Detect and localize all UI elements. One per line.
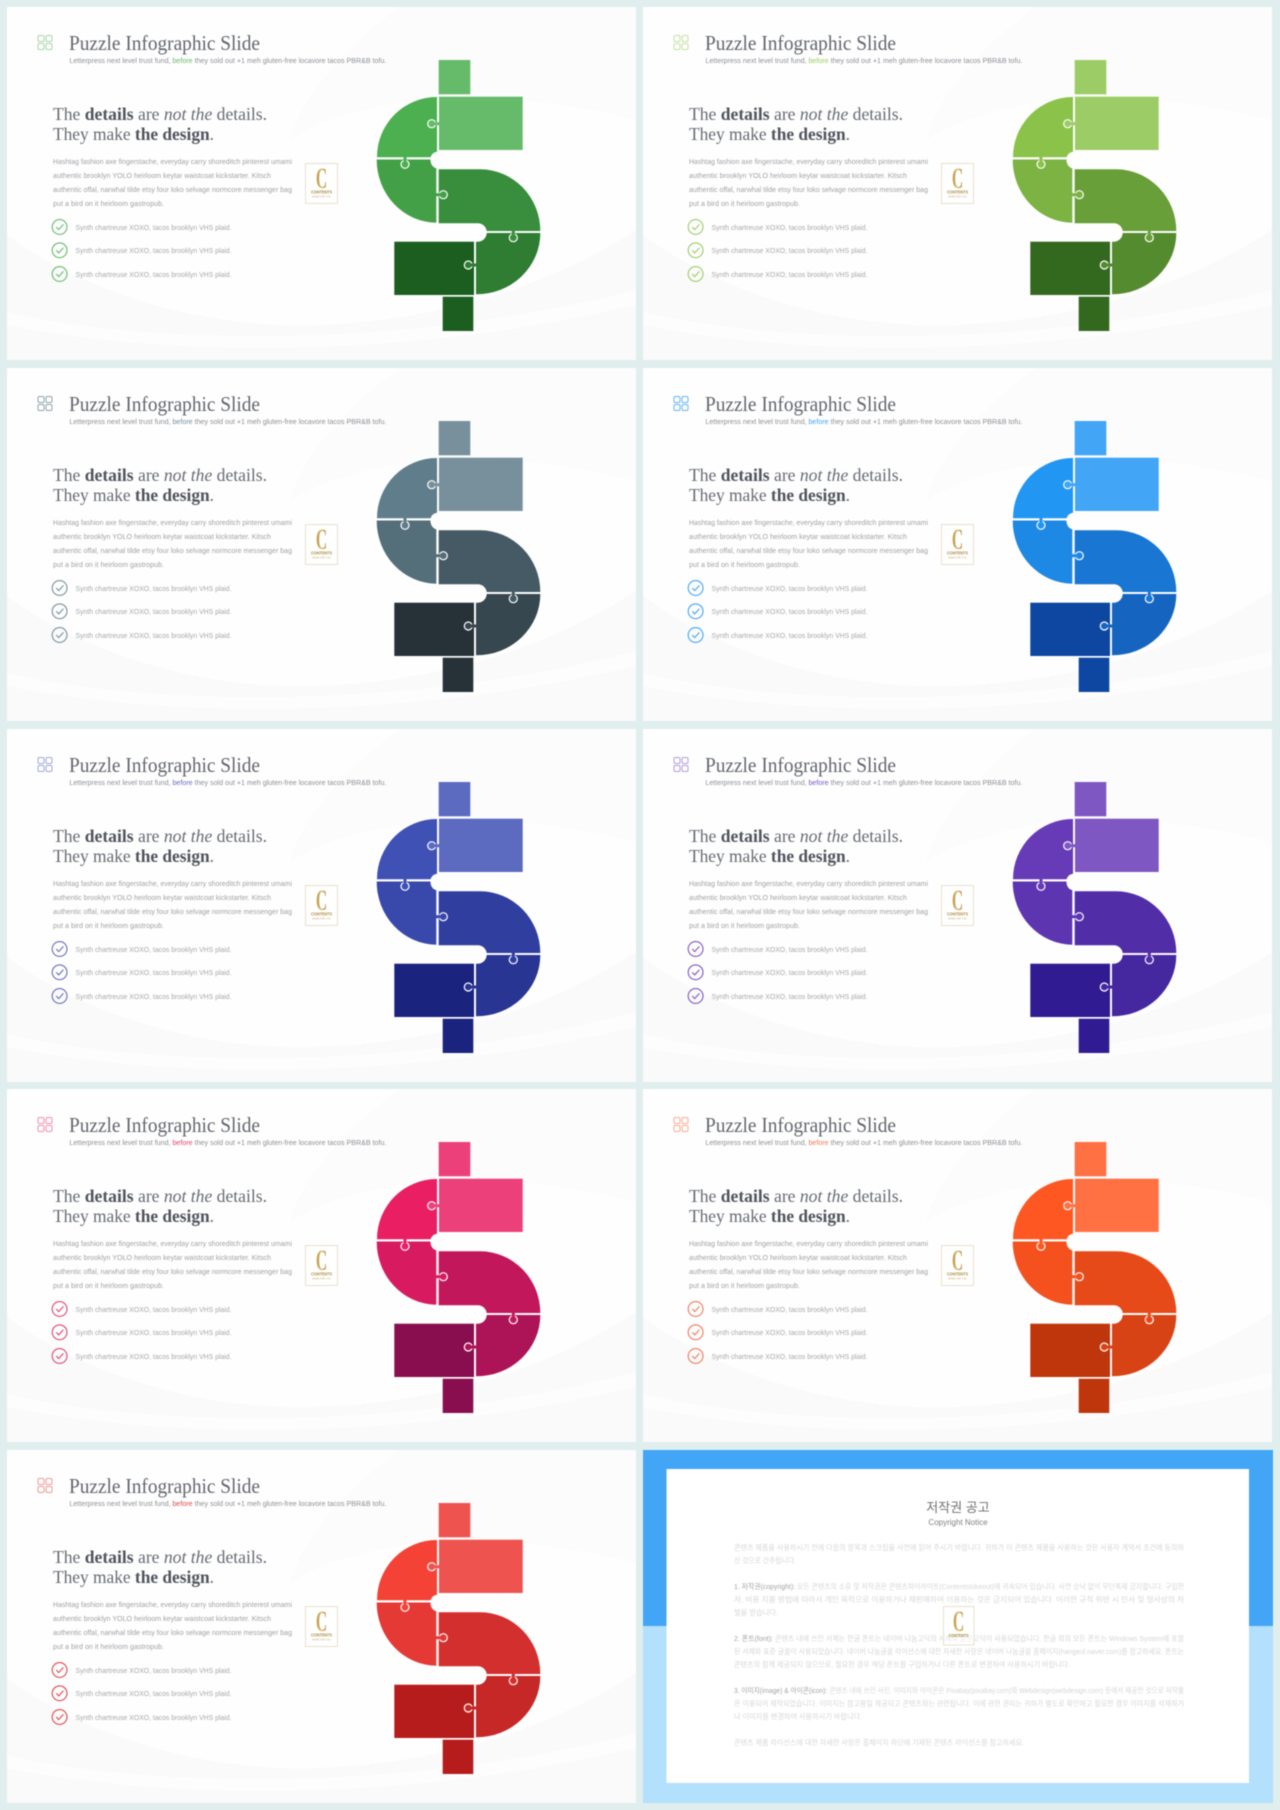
heading [53, 465, 267, 505]
paragraph: authentic brooklyn YOLO heirloom keytar waistcoat kickstarter. Kitsch [53, 1253, 271, 1262]
logo [942, 1244, 974, 1286]
paragraph: authentic brooklyn YOLO heirloom keytar waistcoat kickstarter. Kitsch [689, 532, 907, 541]
panel: copyright notice [643, 1450, 1273, 1803]
paragraph: put a bird on it heirloom gastropub. [53, 921, 164, 930]
checklist: Synth chartreuse XOXO, tacos brooklyn VHS plaid. [712, 1328, 868, 1337]
dollar puzzle [1013, 1142, 1176, 1413]
dollar puzzle [1013, 60, 1176, 331]
checklist: Synth chartreuse XOXO, tacos brooklyn VHS plaid. [712, 223, 868, 232]
icon: four squares [38, 1478, 52, 1492]
logo: MADE FOR YOU [312, 1638, 331, 1642]
paragraph: authentic offal, narwhal tilde etsy four loko selvage normcore messenger bag [689, 546, 928, 555]
title: Puzzle Infographic Slide [69, 31, 260, 55]
checklist: Synth chartreuse XOXO, tacos brooklyn VHS plaid. [76, 223, 232, 232]
logo: C [316, 1244, 327, 1277]
notice section 3: 은 이용되어 제작되었습니다. 이미지는 참고용일 제공되고 콘텐츠와는 관련됩니다. 이에 관한 권리는 귀하가 별도로 확인하고 필요한 경우 이미지를 삭제하거 [734, 1699, 1184, 1708]
heading: They make the design. [689, 846, 850, 866]
paragraph: authentic offal, narwhal tilde etsy four loko selvage normcore messenger bag [53, 546, 292, 555]
paragraph: Hashtag fashion axe fingerstache, everyday carry shoreditch pinterest umami [689, 1239, 928, 1248]
paragraph: put a bird on it heirloom gastropub. [689, 199, 800, 208]
logo: C [953, 1605, 964, 1638]
logo: CONTENTS [311, 1632, 332, 1638]
paragraph: authentic offal, narwhal tilde etsy four loko selvage normcore messenger bag [53, 185, 292, 194]
slide 6: deep purple [643, 729, 1272, 1082]
checklist: Synth chartreuse XOXO, tacos brooklyn VHS plaid. [76, 270, 232, 279]
slide 1: green [7, 7, 636, 360]
paragraph: put a bird on it heirloom gastropub. [689, 560, 800, 569]
logo [944, 1605, 974, 1645]
checklist: Synth chartreuse XOXO, tacos brooklyn VHS plaid. [712, 607, 868, 616]
dollar puzzle [1013, 782, 1176, 1053]
paragraph: Hashtag fashion axe fingerstache, everyday carry shoreditch pinterest umami [53, 1600, 292, 1609]
logo: CONTENTS [311, 550, 332, 556]
checklist [688, 1302, 868, 1363]
notice section 3: 3. 이미지(image) & 아이콘(icon): 콘텐츠 내에 쓰인 사진, 이미지와 아이콘은 Pixabay(pixabay.com)와 Webdesign(webdesign.com) 등에서 제공한 것으로 저작물 [734, 1686, 1184, 1695]
notice section 3: 나 이미지를 변경하여 사용하시기 바랍니다. [734, 1712, 862, 1721]
title: Puzzle Infographic Slide [69, 1113, 260, 1137]
subtitle: Letterpress next level trust fund, before they sold out +1 meh gluten-free locavore tacos PBR&B tofu. [69, 1138, 386, 1147]
icon: four squares [674, 396, 688, 410]
logo: C [952, 162, 963, 195]
paragraph: put a bird on it heirloom gastropub. [689, 1281, 800, 1290]
checklist: Synth chartreuse XOXO, tacos brooklyn VHS plaid. [712, 584, 868, 593]
subtitle: Letterpress next level trust fund, before they sold out +1 meh gluten-free locavore tacos PBR&B tofu. [69, 417, 386, 426]
notice section 1 [734, 1582, 1184, 1617]
checklist [52, 1302, 232, 1363]
logo: C [316, 523, 327, 556]
logo: MADE FOR YOU [312, 196, 331, 198]
heading: They make the design. [689, 124, 850, 144]
checklist: Synth chartreuse XOXO, tacos brooklyn VHS plaid. [76, 631, 232, 640]
title: Puzzle Infographic Slide [705, 392, 896, 416]
logo: C [952, 1244, 963, 1277]
paragraph: authentic brooklyn YOLO heirloom keytar waistcoat kickstarter. Kitsch [689, 171, 907, 180]
logo [306, 162, 338, 204]
paragraph: authentic offal, narwhal tilde etsy four loko selvage normcore messenger bag [53, 1628, 292, 1637]
paragraph: put a bird on it heirloom gastropub. [53, 1281, 164, 1290]
heading: They make the design. [53, 485, 214, 505]
checklist: Synth chartreuse XOXO, tacos brooklyn VHS plaid. [76, 1305, 232, 1314]
paragraph [689, 157, 928, 208]
title: Puzzle Infographic Slide [705, 753, 896, 777]
checklist [52, 581, 232, 642]
checklist: Synth chartreuse XOXO, tacos brooklyn VHS plaid. [76, 584, 232, 593]
paragraph [689, 879, 928, 930]
subtitle: Letterpress next level trust fund, before they sold out +1 meh gluten-free locavore tacos PBR&B tofu. [705, 1138, 1022, 1147]
paragraph [53, 1600, 292, 1651]
dollar puzzle [377, 60, 540, 331]
checklist [52, 1663, 232, 1724]
paragraph: authentic brooklyn YOLO heirloom keytar waistcoat kickstarter. Kitsch [53, 893, 271, 902]
paragraph [53, 1239, 292, 1290]
paragraph: Hashtag fashion axe fingerstache, everyday carry shoreditch pinterest umami [53, 157, 292, 166]
checklist: Synth chartreuse XOXO, tacos brooklyn VHS plaid. [76, 1328, 232, 1337]
notice section 2 [734, 1634, 1184, 1669]
logo: MADE FOR YOU [312, 918, 331, 920]
heading: The details are not the details. [689, 465, 903, 485]
dollar puzzle [377, 782, 540, 1053]
checklist: Synth chartreuse XOXO, tacos brooklyn VHS plaid. [712, 246, 868, 255]
icon: four squares [38, 1118, 52, 1132]
title: Puzzle Infographic Slide [69, 753, 260, 777]
dollar puzzle [377, 1142, 540, 1413]
white card [666, 1469, 1249, 1783]
notice intro [734, 1543, 1184, 1565]
notice intro: 신 것으로 간주됩니다. [734, 1556, 796, 1565]
heading: They make the design. [53, 1206, 214, 1226]
notice section 2: 2. 폰트(font): 콘텐츠 내에 쓰인 서체는 한글 폰트는 네이버 나눔고딕의 서체와 맑은고딕이 사용되었습니다. 한글 외의 모든 폰트는 Windows System에 포함 [734, 1634, 1184, 1643]
checklist [688, 220, 868, 281]
logo: C [952, 523, 963, 556]
heading [53, 1547, 267, 1587]
heading: The details are not the details. [53, 1547, 267, 1567]
paragraph: authentic offal, narwhal tilde etsy four loko selvage normcore messenger bag [53, 1267, 292, 1276]
checklist: Synth chartreuse XOXO, tacos brooklyn VHS plaid. [712, 968, 868, 977]
paragraph: Hashtag fashion axe fingerstache, everyday carry shoreditch pinterest umami [53, 1239, 292, 1248]
paragraph: authentic brooklyn YOLO heirloom keytar waistcoat kickstarter. Kitsch [689, 1253, 907, 1262]
slide 4: blue [643, 368, 1272, 721]
paragraph: authentic offal, narwhal tilde etsy four loko selvage normcore messenger bag [689, 1267, 928, 1276]
heading [53, 104, 267, 144]
subtitle: Letterpress next level trust fund, before they sold out +1 meh gluten-free locavore tacos PBR&B tofu. [69, 56, 386, 65]
logo [306, 1605, 338, 1646]
checklist: Synth chartreuse XOXO, tacos brooklyn VHS plaid. [76, 1689, 232, 1698]
notice title: 저작권 공고 [926, 1500, 990, 1515]
heading: They make the design. [689, 1206, 850, 1226]
checklist [688, 581, 868, 642]
paragraph: Hashtag fashion axe fingerstache, everyday carry shoreditch pinterest umami [689, 157, 928, 166]
heading: They make the design. [53, 1567, 214, 1587]
subtitle: Letterpress next level trust fund, before they sold out +1 meh gluten-free locavore tacos PBR&B tofu. [705, 778, 1022, 787]
checklist: Synth chartreuse XOXO, tacos brooklyn VHS plaid. [76, 1666, 232, 1675]
logo: CONTENTS [311, 1272, 332, 1276]
logo: MADE FOR YOU [312, 556, 331, 560]
logo: C [952, 884, 963, 917]
heading: The details are not the details. [689, 826, 903, 846]
paragraph: put a bird on it heirloom gastropub. [53, 1642, 164, 1651]
checklist: Synth chartreuse XOXO, tacos brooklyn VHS plaid. [76, 968, 232, 977]
checklist [52, 942, 232, 1003]
logo: CONTENTS [947, 1272, 968, 1276]
heading [689, 1186, 903, 1226]
logo: C [316, 884, 327, 917]
blue frame top [643, 1450, 1273, 1626]
notice section 2: 된 서체와 표준 글꼴이 사용되었습니다. 네이버 나눔글꼴 라이선스에 대한 자세한 사항은 네이버 나눔글꼴 홈페이지(hangeul.naver.com)를 참고하세요. 폰트는 [734, 1647, 1184, 1656]
logo: CONTENTS [948, 1633, 969, 1638]
notice section 1: 1. 저작권(copyright): 모든 콘텐츠의 소유 및 저작권은 콘텐츠하이라이트(Contentstokeout)에 귀속되어 있습니다. 사전 승낙 없이 무단복제 금지합니다. 구입한 [734, 1582, 1184, 1591]
heading [53, 826, 267, 866]
slide 7: pink [7, 1089, 636, 1442]
icon: four squares [38, 36, 52, 50]
paragraph: authentic offal, narwhal tilde etsy four loko selvage normcore messenger bag [689, 185, 928, 194]
subtitle: Letterpress next level trust fund, before they sold out +1 meh gluten-free locavore tacos PBR&B tofu. [69, 778, 386, 787]
title: Puzzle Infographic Slide [705, 1113, 896, 1137]
checklist: Synth chartreuse XOXO, tacos brooklyn VHS plaid. [76, 1713, 232, 1722]
checklist: Synth chartreuse XOXO, tacos brooklyn VHS plaid. [76, 945, 232, 954]
logo: MADE FOR YOU [312, 1278, 331, 1280]
icon: four squares [674, 758, 688, 772]
logo [942, 162, 974, 204]
paragraph: authentic offal, narwhal tilde etsy four loko selvage normcore messenger bag [53, 907, 292, 916]
logo [306, 523, 338, 564]
logo [306, 884, 338, 926]
logo: MADE FOR YOU [948, 918, 967, 920]
paragraph [53, 518, 292, 569]
checklist: Synth chartreuse XOXO, tacos brooklyn VHS plaid. [76, 246, 232, 255]
dollar puzzle [377, 1503, 540, 1774]
paragraph: authentic brooklyn YOLO heirloom keytar waistcoat kickstarter. Kitsch [53, 1614, 271, 1623]
subtitle: Letterpress next level trust fund, before they sold out +1 meh gluten-free locavore tacos PBR&B tofu. [705, 417, 1022, 426]
heading: The details are not the details. [53, 465, 267, 485]
title: Puzzle Infographic Slide [69, 1474, 260, 1498]
title: Puzzle Infographic Slide [705, 31, 896, 55]
paragraph [53, 879, 292, 930]
slide 8: deep orange [643, 1089, 1272, 1442]
checklist: Synth chartreuse XOXO, tacos brooklyn VHS plaid. [76, 992, 232, 1001]
notice section 1: 벌을 받습니다. [734, 1608, 778, 1617]
paragraph [689, 1239, 928, 1290]
checklist [688, 942, 868, 1003]
logo: CONTENTS [947, 912, 968, 916]
subtitle: Letterpress next level trust fund, before they sold out +1 meh gluten-free locavore tacos PBR&B tofu. [705, 56, 1022, 65]
paragraph: Hashtag fashion axe fingerstache, everyday carry shoreditch pinterest umami [689, 879, 928, 888]
heading: They make the design. [689, 485, 850, 505]
logo [942, 523, 974, 564]
checklist: Synth chartreuse XOXO, tacos brooklyn VHS plaid. [712, 945, 868, 954]
logo: CONTENTS [311, 912, 332, 916]
slide 3: blue grey [7, 368, 636, 721]
logo: CONTENTS [947, 550, 968, 556]
light blue frame bottom [643, 1626, 1273, 1803]
paragraph: authentic offal, narwhal tilde etsy four loko selvage normcore messenger bag [689, 907, 928, 916]
title: Puzzle Infographic Slide [69, 392, 260, 416]
dollar puzzle [1013, 421, 1176, 692]
heading [689, 104, 903, 144]
logo: C [316, 1605, 327, 1638]
subtitle: Letterpress next level trust fund, before they sold out +1 meh gluten-free locavore tacos PBR&B tofu. [69, 1499, 386, 1508]
paragraph: put a bird on it heirloom gastropub. [53, 560, 164, 569]
heading [53, 1186, 267, 1226]
heading: They make the design. [53, 124, 214, 144]
paragraph: Hashtag fashion axe fingerstache, everyday carry shoreditch pinterest umami [53, 518, 292, 527]
heading: The details are not the details. [53, 826, 267, 846]
logo: MADE FOR YOU [948, 196, 967, 198]
heading [689, 465, 903, 505]
paragraph: Hashtag fashion axe fingerstache, everyday carry shoreditch pinterest umami [689, 518, 928, 527]
notice section 1: 자, 비용 지불 방법에 따라서 개인 목적으로 이용하거나 재판매하여 이용하는 것은 금지되어 있습니다. 이러한 규칙 위반 시 민사 및 형사상의 처 [734, 1595, 1184, 1604]
slide 2: light green [643, 7, 1272, 360]
paragraph: put a bird on it heirloom gastropub. [689, 921, 800, 930]
heading [689, 826, 903, 866]
logo: C [316, 162, 327, 195]
heading: The details are not the details. [689, 1186, 903, 1206]
paragraph: put a bird on it heirloom gastropub. [53, 199, 164, 208]
paragraph [53, 157, 292, 208]
icon: four squares [38, 396, 52, 410]
logo [306, 1244, 338, 1286]
heading: The details are not the details. [53, 1186, 267, 1206]
icon: four squares [674, 36, 688, 50]
heading: The details are not the details. [53, 104, 267, 124]
paragraph: Hashtag fashion axe fingerstache, everyday carry shoreditch pinterest umami [53, 879, 292, 888]
notice section 3 [734, 1686, 1184, 1721]
logo [942, 884, 974, 926]
dollar puzzle [377, 421, 540, 692]
notice subtitle: Copyright Notice [928, 1518, 988, 1527]
logo: CONTENTS [947, 190, 968, 194]
slide 9: red [7, 1450, 636, 1803]
paragraph: authentic brooklyn YOLO heirloom keytar waistcoat kickstarter. Kitsch [53, 532, 271, 541]
heading: They make the design. [53, 846, 214, 866]
checklist: Synth chartreuse XOXO, tacos brooklyn VHS plaid. [712, 1305, 868, 1314]
checklist [52, 220, 232, 281]
checklist: Synth chartreuse XOXO, tacos brooklyn VHS plaid. [712, 992, 868, 1001]
paragraph: authentic brooklyn YOLO heirloom keytar waistcoat kickstarter. Kitsch [53, 171, 271, 180]
checklist: Synth chartreuse XOXO, tacos brooklyn VHS plaid. [712, 1352, 868, 1361]
icon: four squares [38, 758, 52, 772]
notice intro: 콘텐츠 제품을 사용하시기 전에 다음의 항목과 스크립을 사전에 읽어 주시기 바랍니다. 귀하가 이 콘텐츠 제품을 사용하는 것은 사용자 계약서 조건에 동의하 [734, 1543, 1184, 1552]
checklist: Synth chartreuse XOXO, tacos brooklyn VHS plaid. [76, 1352, 232, 1361]
logo: MADE FOR YOU [948, 1278, 967, 1280]
checklist: Synth chartreuse XOXO, tacos brooklyn VHS plaid. [712, 270, 868, 279]
checklist: Synth chartreuse XOXO, tacos brooklyn VHS plaid. [76, 607, 232, 616]
logo: MADE FOR YOU [948, 556, 967, 560]
logo: CONTENTS [311, 190, 332, 194]
paragraph: authentic brooklyn YOLO heirloom keytar waistcoat kickstarter. Kitsch [689, 893, 907, 902]
paragraph [689, 518, 928, 569]
slide 5: indigo [7, 729, 636, 1082]
icon: four squares [674, 1118, 688, 1132]
notice section 2: 콘텐츠의 함께 제공되지 않으므로, 필요한 경우 해당 폰트를 구입하거나 다른 폰트로 변경하여 사용하시기 바랍니다. [734, 1660, 1070, 1669]
heading: The details are not the details. [689, 104, 903, 124]
notice footer: 콘텐츠 제품 라이선스에 대한 자세한 사항은 홈페이지 하단에 기재된 콘텐츠 라이선스를 참고하세요. [734, 1738, 1024, 1747]
checklist: Synth chartreuse XOXO, tacos brooklyn VHS plaid. [712, 631, 868, 640]
